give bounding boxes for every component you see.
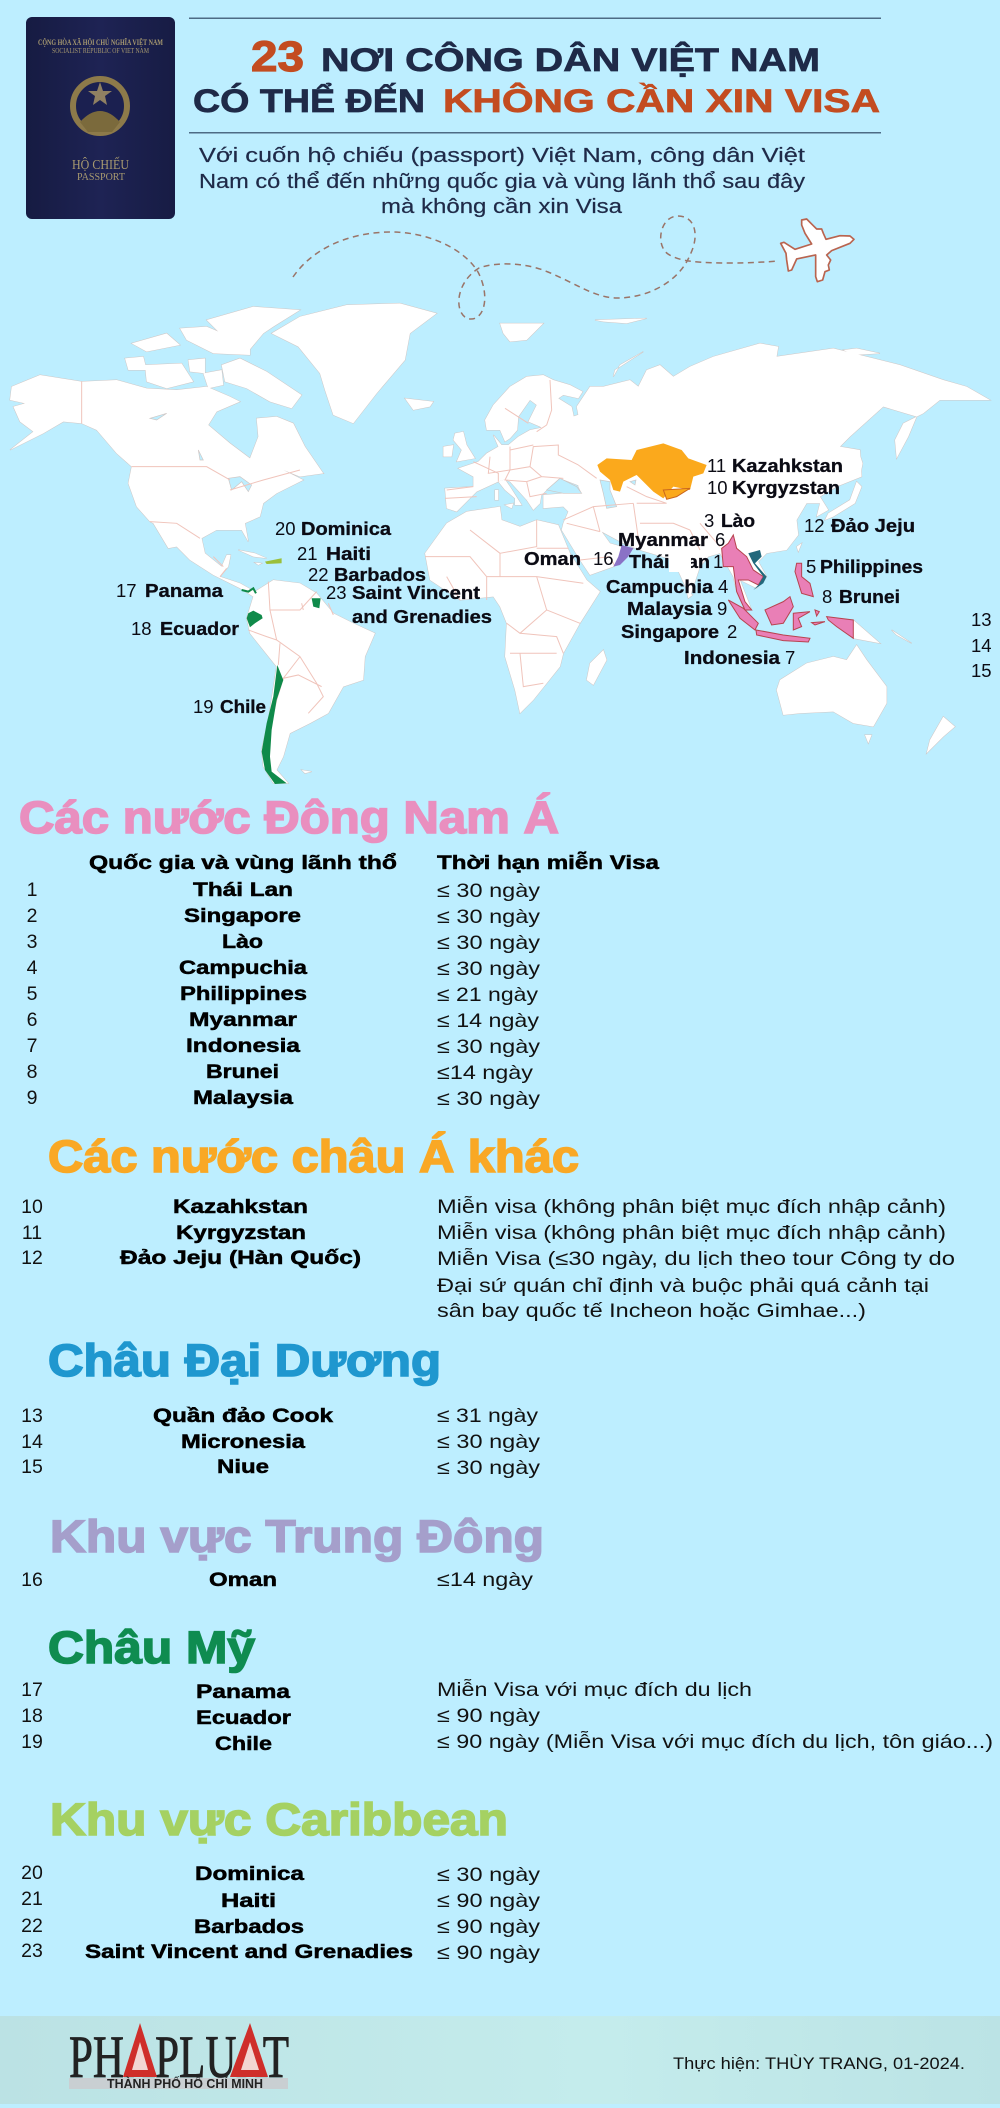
map labels: Americas: Saint Vincent <box>352 582 480 603</box>
title block: NƠI CÔNG DÂN VIỆT NAM <box>321 42 820 78</box>
heading: Middle East: Khu vực Trung Đông <box>50 1511 544 1562</box>
map labels: Americas: 19 <box>193 696 214 717</box>
table: Oceania: Quần đảo Cook <box>153 1405 333 1427</box>
table: Middle East: 16 <box>21 1569 43 1591</box>
map labels: Asia and Oceania: 12 <box>804 515 825 536</box>
footer band <box>0 2016 1000 2104</box>
table: Caribbean: 23 <box>21 1940 43 1962</box>
table: Caribbean: Barbados <box>194 1916 304 1938</box>
map labels: Asia and Oceania: 7 <box>785 647 795 668</box>
table: Southeast Asia: 7 <box>27 1035 37 1057</box>
table: Oceania: Micronesia <box>181 1431 305 1453</box>
map labels: Asia and Oceania: Thái Lan <box>629 551 710 572</box>
map labels: Americas <box>116 518 492 717</box>
map labels: Americas: 22 <box>308 564 329 585</box>
passport image: CỘNG HÒA XÃ HỘI CHỦ NGHĨA VIỆT NAM <box>38 37 163 47</box>
passport image: HỘ CHIẾU <box>72 156 129 173</box>
table: Caribbean <box>21 1862 540 1964</box>
table: Southeast Asia: ≤ 30 ngày <box>437 906 540 928</box>
country borders <box>82 380 720 730</box>
table: Southeast Asia: ≤ 30 ngày <box>437 1088 540 1110</box>
map labels: Asia and Oceania: 13 <box>971 609 992 630</box>
table: other Asian countries <box>21 1195 955 1322</box>
table: other Asian countries: 11 <box>22 1222 42 1244</box>
world map <box>10 303 990 784</box>
table: Oceania: ≤ 31 ngày <box>437 1405 538 1427</box>
highlight: Vietnam <box>748 550 767 590</box>
table: Southeast Asia: Lào <box>222 931 263 953</box>
table: Southeast Asia: 6 <box>27 1009 37 1031</box>
table: Caribbean: ≤ 90 ngày <box>437 1916 540 1938</box>
map labels: Asia and Oceania: Indonesia <box>684 647 781 668</box>
intro paragraph: Với cuốn hộ chiếu (passport) Việt Nam, công dân Việt <box>199 145 806 167</box>
table: other Asian countries: Đảo Jeju (Hàn Quốc) <box>120 1247 361 1269</box>
table: Southeast Asia: Thái Lan <box>193 879 293 901</box>
table: Americas: ≤ 90 ngày <box>437 1705 540 1727</box>
table: Southeast Asia: 9 <box>27 1087 37 1109</box>
table: Americas: Ecuador <box>196 1707 291 1729</box>
highlight: South American dot <box>312 598 321 608</box>
table: Caribbean: Dominica <box>195 1863 304 1885</box>
table: Caribbean: Haiti <box>221 1890 276 1912</box>
table: Middle East: ≤14 ngày <box>437 1569 533 1591</box>
table: Southeast Asia: 1 <box>27 879 37 901</box>
intro paragraph <box>199 145 806 218</box>
highlight: Haiti <box>265 558 282 564</box>
table: Southeast Asia: 2 <box>27 905 37 927</box>
table: Southeast Asia: 8 <box>27 1061 37 1083</box>
table: Southeast Asia: Myanmar <box>189 1009 298 1031</box>
table: other Asian countries: Miễn Visa (≤30 ngày, du lịch theo tour Công ty do <box>437 1247 955 1270</box>
table: Oceania: ≤ 30 ngày <box>437 1457 540 1479</box>
table: Southeast Asia: Philippines <box>180 983 307 1005</box>
map labels: Asia and Oceania: Myanmar <box>618 529 708 550</box>
map labels: Asia and Oceania: Lào <box>721 510 755 531</box>
logo: Pháp Luật: THÀNH PHỐ HỒ CHÍ MINH <box>107 2076 263 2091</box>
table: Americas <box>21 1678 993 1755</box>
table: Middle East: Oman <box>209 1569 277 1591</box>
map labels: Asia and Oceania: 2 <box>727 621 737 642</box>
table: Americas: Miễn Visa với mục đích du lịch <box>437 1678 752 1701</box>
table: Southeast Asia: ≤ 30 ngày <box>437 1036 540 1058</box>
map labels: Asia and Oceania: Kazahkstan <box>732 455 843 476</box>
intro paragraph: Nam có thể đến những quốc gia và vùng lãnh thổ sau đây <box>199 171 805 193</box>
map labels: Americas: Barbados <box>334 564 426 585</box>
map labels: Asia and Oceania: 9 <box>717 598 727 619</box>
map labels: Americas: Panama <box>145 580 224 601</box>
map labels: Americas: Chile <box>220 696 266 717</box>
table: Southeast Asia: Singapore <box>184 905 301 927</box>
highlight: mainland Southeast Asia <box>722 535 763 610</box>
title block <box>189 18 881 134</box>
map labels: Americas: 21 <box>297 543 318 564</box>
passport image <box>26 17 175 219</box>
table: Oceania: 14 <box>21 1431 43 1453</box>
table: Americas: Chile <box>215 1733 272 1755</box>
table: Southeast Asia: ≤ 14 ngày <box>437 1010 539 1032</box>
table: Southeast Asia: 5 <box>27 983 38 1005</box>
map labels: Asia and Oceania: 3 <box>704 510 714 531</box>
table: other Asian countries: Kyrgyzstan <box>176 1222 306 1244</box>
table: Oceania <box>21 1405 540 1479</box>
heading: other Asian countries: Các nước châu Á khác <box>48 1131 579 1182</box>
map labels: Asia and Oceania: 14 <box>971 635 992 656</box>
title block: 23 <box>251 33 304 81</box>
icon: airplane <box>781 219 854 282</box>
table: Southeast Asia <box>27 850 659 1110</box>
credit text: Thực hiện: THÙY TRANG, 01-2024. <box>673 2054 965 2073</box>
highlight: Panama <box>242 588 256 593</box>
table: Southeast Asia: 3 <box>27 931 37 953</box>
table: Southeast Asia: ≤ 30 ngày <box>437 880 540 902</box>
table: Americas: 17 <box>21 1679 43 1701</box>
map labels: Asia and Oceania: Oman <box>524 548 581 569</box>
table: Americas: ≤ 90 ngày (Miễn Visa với mục đích du lịch, tôn giáo...) <box>437 1730 993 1753</box>
table: Oceania: ≤ 30 ngày <box>437 1431 540 1453</box>
table: Caribbean: ≤ 90 ngày <box>437 1890 540 1912</box>
table: Southeast Asia: Malaysia <box>193 1087 293 1109</box>
map labels: Americas: and Grenadies <box>352 606 492 627</box>
map labels: Asia and Oceania: 6 <box>715 529 725 550</box>
map labels: Asia and Oceania: 8 <box>822 586 832 607</box>
map labels: Asia and Oceania: 5 <box>806 556 816 577</box>
table: Americas: 18 <box>21 1705 43 1727</box>
passport image: PASSPORT <box>77 172 125 183</box>
highlight: Kazakhstan and Kyrgyzstan <box>597 443 707 499</box>
map labels: Americas: 20 <box>275 518 296 539</box>
table: Oceania: 15 <box>21 1456 43 1478</box>
map labels: Asia and Oceania: 15 <box>971 660 992 681</box>
map labels: Americas: 23 <box>326 582 347 603</box>
dashed flight path <box>293 216 779 319</box>
map labels: Asia and Oceania: 11 <box>707 455 726 476</box>
table: Southeast Asia: Indonesia <box>186 1035 300 1057</box>
highlight: Philippines <box>795 563 813 597</box>
table: Southeast Asia: ≤ 30 ngày <box>437 932 540 954</box>
table: Southeast Asia: Thời hạn miễn Visa <box>437 850 659 874</box>
table: Caribbean: ≤ 90 ngày <box>437 1942 540 1964</box>
heading: Americas: Châu Mỹ <box>48 1622 255 1673</box>
map labels: Americas: 18 <box>131 618 152 639</box>
map labels: Asia and Oceania: 1 <box>713 551 723 572</box>
table: Southeast Asia: Campuchia <box>179 957 307 979</box>
table: Caribbean: 22 <box>21 1915 43 1937</box>
table: other Asian countries: sân bay quốc tế Incheon hoặc Gimhae...) <box>437 1300 866 1322</box>
heading: Oceania: Châu Đại Dương <box>48 1335 441 1386</box>
table: other Asian countries: Kazahkstan <box>173 1196 308 1218</box>
heading: Southeast Asia: Các nước Đông Nam Á <box>19 792 559 843</box>
map labels: Asia and Oceania <box>524 455 992 681</box>
table: Southeast Asia: 4 <box>27 957 38 979</box>
table: Middle East <box>21 1569 533 1591</box>
table: other Asian countries: Miễn visa (không phân biệt mục đích nhập cảnh) <box>437 1221 946 1244</box>
highlight: Indonesia <box>728 597 853 642</box>
table: Oceania: 13 <box>21 1405 43 1427</box>
table: other Asian countries: Miễn visa (không phân biệt mục đích nhập cảnh) <box>437 1195 946 1218</box>
table: Oceania: Niue <box>217 1456 269 1478</box>
title block: CÓ THỂ ĐẾN <box>193 83 425 119</box>
table: Southeast Asia: ≤ 21 ngày <box>437 984 538 1006</box>
heading: Caribbean: Khu vực Caribbean <box>50 1794 508 1845</box>
map labels: Asia and Oceania: Đảo Jeju <box>831 515 915 536</box>
map labels: Americas: Ecuador <box>160 618 239 639</box>
table: Southeast Asia: ≤ 30 ngày <box>437 958 540 980</box>
map labels: Asia and Oceania: 4 <box>718 576 728 597</box>
logo: Pháp Luật: PHAPLUAT <box>69 2024 289 2090</box>
intro paragraph: mà không cần xin Visa <box>381 196 623 218</box>
table: Americas: Panama <box>196 1681 290 1703</box>
highlight: Chile <box>262 665 287 784</box>
title block: KHÔNG CẦN XIN VISA <box>443 83 880 119</box>
highlight: Ecuador <box>247 611 263 627</box>
map labels: Asia and Oceania: 10 <box>707 477 728 498</box>
table: other Asian countries: 12 <box>21 1247 43 1269</box>
table: Caribbean: ≤ 30 ngày <box>437 1864 540 1886</box>
table: Caribbean: 21 <box>21 1888 43 1910</box>
map labels: Asia and Oceania: Kyrgyzstan <box>732 477 840 498</box>
map labels: Americas: Dominica <box>301 518 392 539</box>
map labels: Asia and Oceania: Singapore <box>621 621 719 642</box>
map labels: Asia and Oceania: Philippines <box>820 556 923 577</box>
table: Caribbean: Saint Vincent and Grenadies <box>85 1941 413 1963</box>
table: other Asian countries: 10 <box>21 1196 43 1218</box>
map labels: Americas: 17 <box>116 580 137 601</box>
passport image: SOCIALIST REPUBLIC OF VIET NAM <box>52 47 150 55</box>
table: Southeast Asia: Quốc gia và vùng lãnh thổ <box>89 852 397 874</box>
map labels: Asia and Oceania: Malaysia <box>627 598 713 619</box>
map labels: Asia and Oceania: Brunei <box>839 586 900 607</box>
map labels: Americas: Haiti <box>326 543 371 564</box>
table: other Asian countries: Đại sứ quán chỉ định và buộc phải quá cảnh tại <box>437 1275 929 1297</box>
table: Southeast Asia: ≤14 ngày <box>437 1062 533 1084</box>
table: Americas: 19 <box>21 1731 43 1753</box>
map labels: Asia and Oceania: 16 <box>593 548 614 569</box>
map labels: Asia and Oceania: Campuchia <box>606 576 714 597</box>
table: Southeast Asia: Brunei <box>206 1061 279 1083</box>
highlight: Oman <box>613 545 633 567</box>
table: Caribbean: 20 <box>21 1862 43 1884</box>
